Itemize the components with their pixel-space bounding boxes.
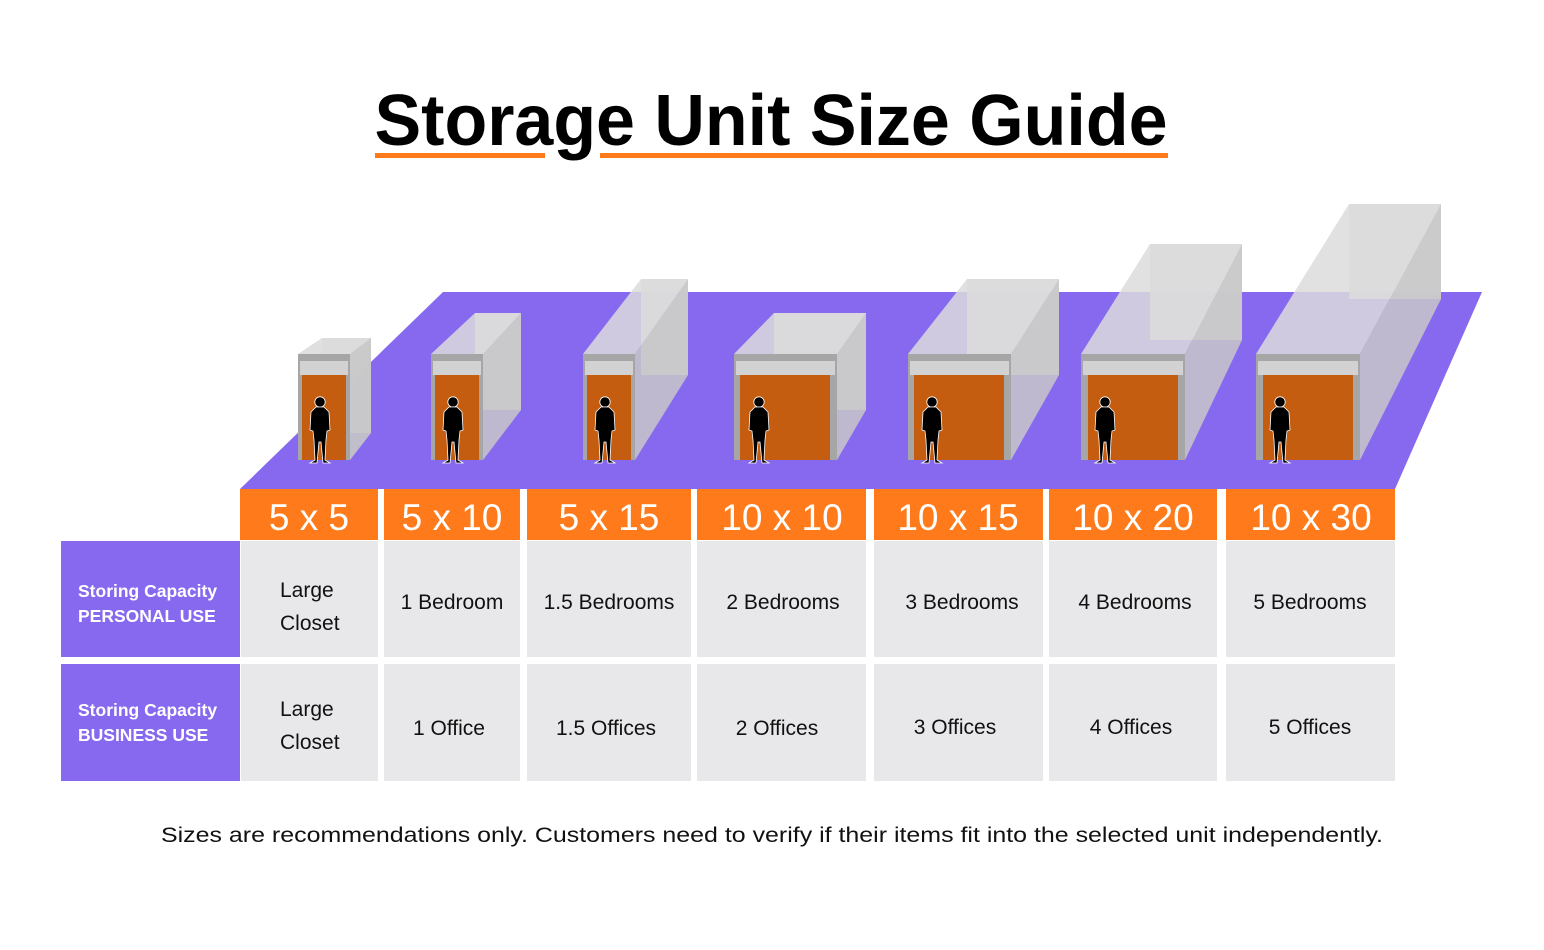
row label: personal use: PERSONAL USE bbox=[78, 606, 216, 626]
personal use row cells bbox=[241, 541, 1395, 657]
business use row cells: 1 Office bbox=[413, 717, 485, 740]
row label: business use: Storing Capacity bbox=[78, 700, 217, 720]
unit 5x10 bbox=[431, 313, 521, 463]
row label: personal use: Storing Capacity bbox=[78, 581, 217, 601]
title: Storage Unit Size Guide bbox=[374, 81, 1168, 161]
unit 5x15 bbox=[583, 279, 688, 463]
personal use row cells: 1.5 Bedrooms bbox=[544, 591, 674, 614]
size header row: 5 x 15 bbox=[559, 497, 659, 538]
personal use row cells: 4 Bedrooms bbox=[1078, 591, 1192, 614]
business use row cells: Closet bbox=[280, 731, 340, 754]
size header row: 10 x 30 bbox=[1250, 497, 1372, 538]
row label: business use bbox=[61, 664, 240, 781]
storage units bbox=[298, 204, 1441, 463]
unit 10x30 bbox=[1256, 204, 1441, 463]
personal use row cells: Large bbox=[280, 579, 334, 602]
business use row cells: Large bbox=[280, 698, 334, 721]
business use row cells: 3 Offices bbox=[914, 716, 996, 739]
size header row: 10 x 15 bbox=[897, 497, 1019, 538]
personal use row cells: Closet bbox=[280, 612, 340, 635]
size header row: 5 x 10 bbox=[402, 497, 502, 538]
business use row cells: 5 Offices bbox=[1269, 716, 1351, 739]
unit 10x20 bbox=[1081, 244, 1242, 463]
personal use row cells: 5 Bedrooms bbox=[1253, 591, 1367, 614]
unit 10x15 bbox=[908, 279, 1059, 463]
business use row cells: 1.5 Offices bbox=[556, 717, 656, 740]
business use row cells: 2 Offices bbox=[736, 717, 818, 740]
row label: personal use bbox=[61, 541, 240, 657]
personal use row cells: 3 Bedrooms bbox=[905, 591, 1019, 614]
purple floor bbox=[240, 292, 1482, 489]
footer note: Sizes are recommendations only. Customers need to verify if their items fit into the selected unit independently. bbox=[161, 823, 1383, 847]
size header row: 10 x 10 bbox=[721, 497, 843, 538]
size header row: 5 x 5 bbox=[269, 497, 349, 538]
row label: business use: BUSINESS USE bbox=[78, 725, 208, 745]
size header row bbox=[240, 489, 1395, 540]
business use row cells: 4 Offices bbox=[1090, 716, 1172, 739]
unit 10x10 bbox=[734, 313, 866, 463]
personal use row cells: 2 Bedrooms bbox=[726, 591, 840, 614]
personal use row cells: 1 Bedroom bbox=[401, 591, 503, 614]
unit 5x5 bbox=[298, 338, 371, 463]
size header row: 10 x 20 bbox=[1072, 497, 1194, 538]
business use row cells bbox=[241, 664, 1395, 781]
